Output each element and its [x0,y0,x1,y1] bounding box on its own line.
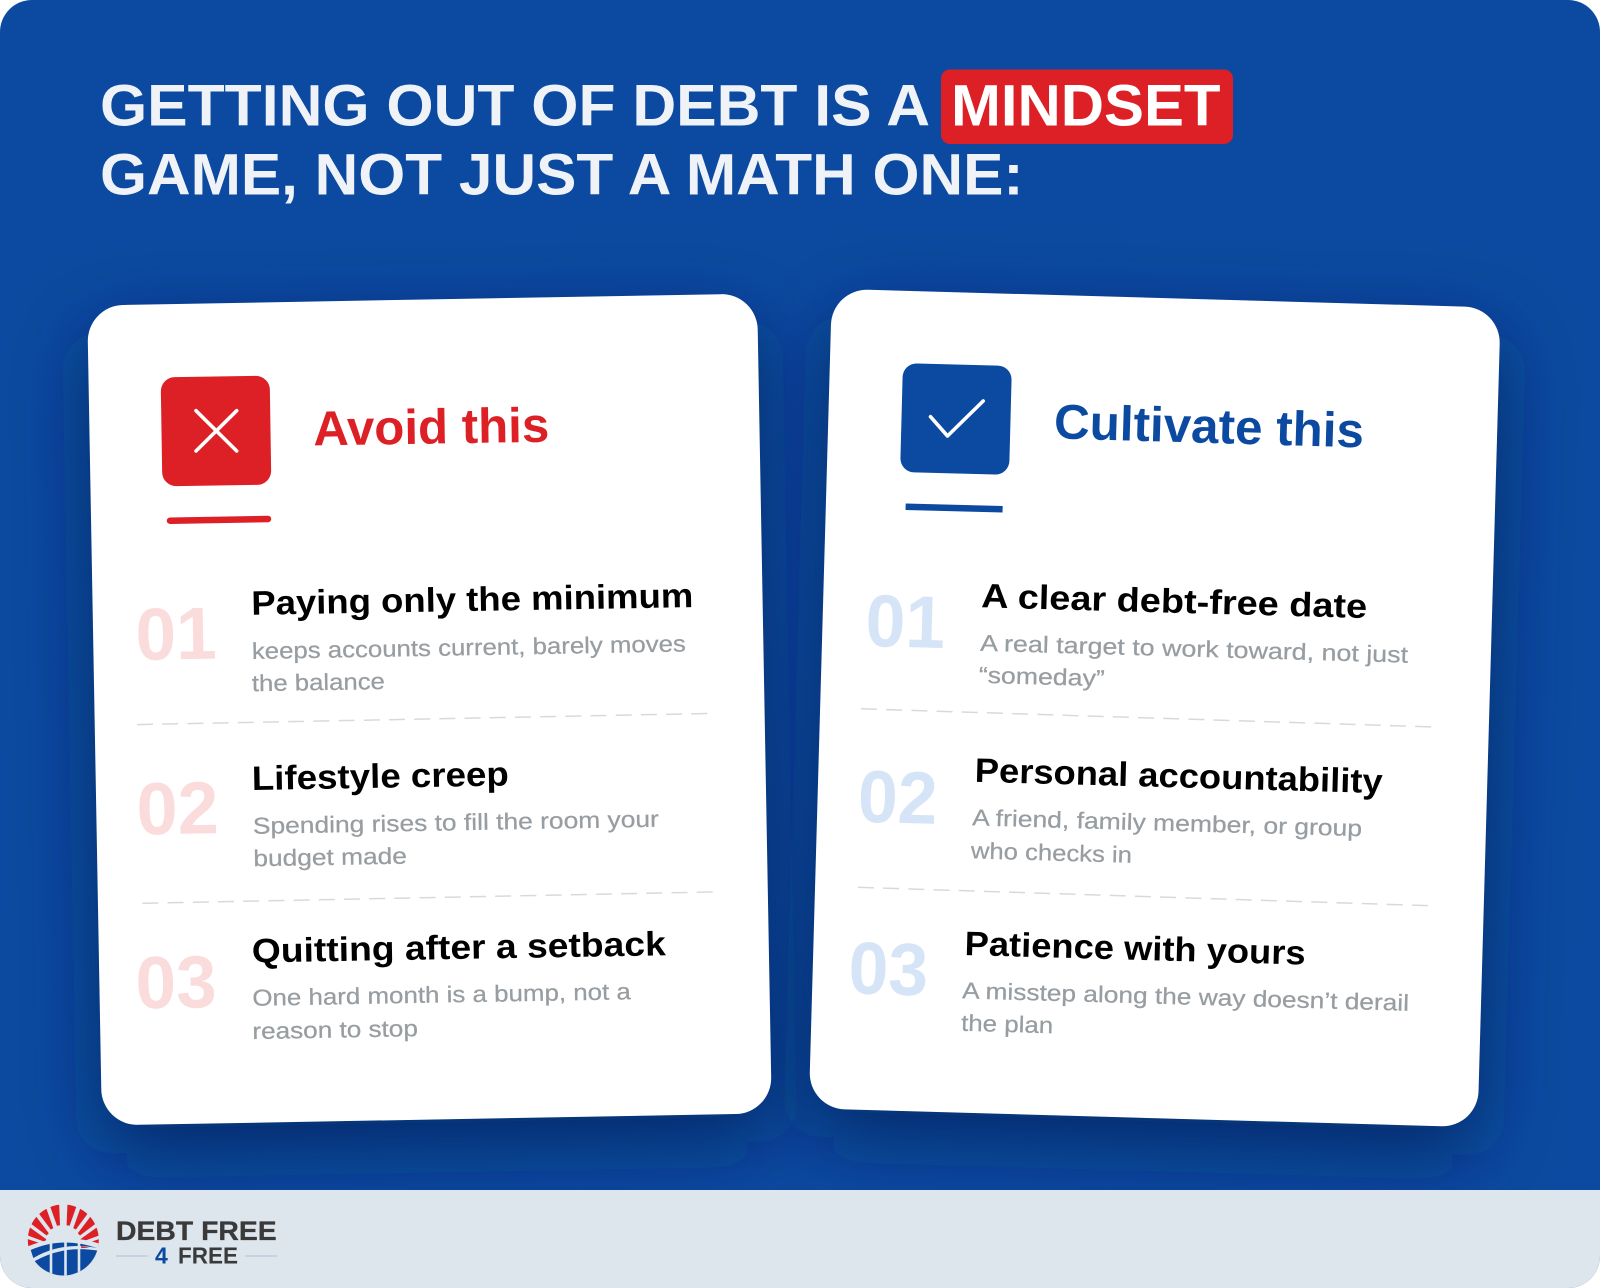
item: paying only the minimum [138,584,692,692]
item: lifestyle creep [136,756,659,871]
item: patience with yours: 03 [848,926,929,1011]
heading: avoid this: Avoid this [313,399,550,456]
item: paying only the minimum: Paying only the minimum [251,577,694,623]
item: a clear debt-free date: 01 [865,579,946,664]
item: personal accountability: Personal accountability [974,752,1383,801]
footer band [0,1190,1600,1288]
item: quitting after a setback: Quitting after a setback [251,925,666,970]
underline: blue [906,507,1003,509]
item: a clear debt-free date: A clear debt-free date [981,577,1368,626]
item: personal accountability [860,758,1383,863]
wordmark: FREE [178,1242,238,1268]
item: lifestyle creep: budget made [253,843,407,871]
icon: debt free 4 free logo [28,1204,99,1276]
panel: avoid this [87,294,772,1125]
item: lifestyle creep: 02 [136,766,219,850]
item: personal accountability: who checks in [970,837,1132,868]
wordmark: 4 [155,1242,168,1268]
item: personal accountability: 02 [857,755,939,840]
item: quitting after a setback: One hard month is a bump, not a [252,978,631,1011]
item: personal accountability: A friend, family member, or group [972,804,1362,841]
item: paying only the minimum: keeps accounts current, barely moves [252,630,686,664]
item: lifestyle creep: Lifestyle creep [251,756,509,798]
item: patience with yours: A misstep along the way doesn’t derail [962,977,1409,1016]
heading: cultivate this: Cultivate this [1053,395,1365,458]
item: paying only the minimum: the balance [252,668,385,696]
item: quitting after a setback: reason to stop [252,1015,418,1044]
item: patience with yours: the plan [961,1010,1054,1038]
item: patience with yours: Patience with yours [964,925,1306,973]
item: lifestyle creep: Spending rises to fill the room your [253,806,659,839]
icon: red cross [161,376,271,486]
panel: cultivate this [809,289,1501,1127]
item: a clear debt-free date [865,577,1409,691]
wordmark [116,1221,277,1264]
underline: red [170,519,268,521]
item: patience with yours [848,925,1409,1038]
icon: blue check [900,363,1012,475]
item: quitting after a setback: 03 [135,940,217,1024]
item: a clear debt-free date: “someday” [978,662,1105,691]
item: paying only the minimum: 01 [135,592,217,676]
item: a clear debt-free date: A real target to work toward, not just [980,630,1409,668]
highlight: mindset: MINDSET [951,74,1220,139]
title: GAME, NOT JUST A MATH ONE: [100,143,1024,208]
wordmark: DEBT FREE [116,1216,277,1246]
item: quitting after a setback [135,925,666,1044]
title: GETTING OUT OF DEBT IS A [100,74,930,139]
title [100,70,1233,208]
